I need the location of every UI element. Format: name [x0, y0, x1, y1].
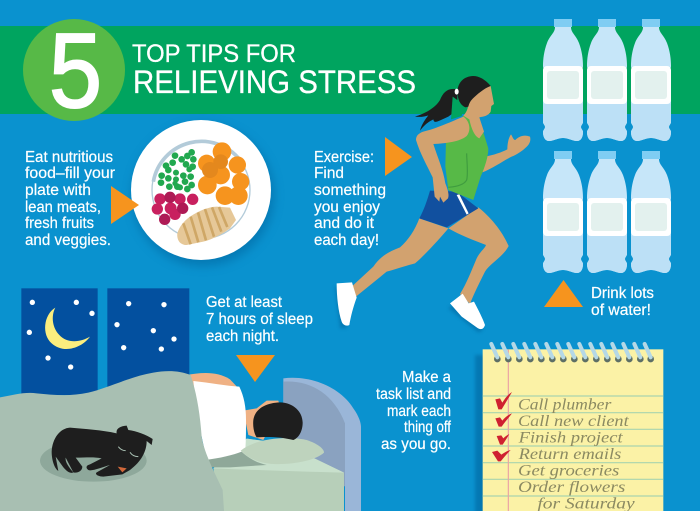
text: task tip — [376, 369, 452, 453]
title: TOP TIPS FOR — [132, 40, 296, 68]
pillow — [241, 438, 324, 464]
plate rim — [152, 141, 250, 239]
text: task tip: as you go. — [381, 436, 451, 453]
text: exercise tip: Exercise: — [314, 149, 374, 166]
text: exercise tip: you enjoy — [314, 199, 380, 216]
neck and hand — [243, 401, 280, 440]
shirt fold — [448, 153, 467, 187]
arrow: water — [544, 280, 583, 307]
head board — [283, 378, 361, 511]
text: sleep tip: each night. — [206, 328, 279, 345]
spiral binding — [491, 344, 654, 362]
shoulder skin — [187, 373, 240, 390]
shoes — [337, 282, 485, 329]
title: RELIEVING STRESS — [133, 64, 416, 100]
margin line — [507, 349, 510, 511]
moon — [45, 308, 90, 349]
mattress — [213, 439, 344, 511]
shadow — [475, 355, 662, 511]
text: nutrition tip: fresh fruits — [25, 215, 94, 232]
text: nutrition tip: lean meats, — [25, 199, 101, 216]
shorts — [419, 191, 478, 227]
text: exercise tip: Find — [314, 165, 344, 182]
window right — [107, 288, 189, 388]
ponytail — [415, 89, 457, 131]
handwritten list: Get groceries — [518, 462, 619, 479]
blanket — [0, 371, 224, 511]
neck and head — [463, 86, 494, 138]
text: nutrition tip: plate with — [25, 182, 91, 199]
green title band — [0, 26, 700, 114]
runner — [335, 76, 530, 333]
text: nutrition tip: and veggies. — [25, 232, 111, 249]
text: task tip: thing off — [404, 419, 452, 436]
arrow: nutrition — [111, 186, 139, 224]
handwritten list: Call new client — [518, 413, 630, 430]
window left — [21, 288, 98, 395]
text: sleep tip — [206, 294, 313, 345]
near arm — [416, 117, 469, 203]
front leg — [448, 207, 509, 304]
text: sleep tip: Get at least — [206, 294, 283, 311]
shorts stripe — [457, 194, 469, 215]
carrots — [198, 142, 249, 205]
green collar behind neck — [451, 97, 464, 119]
torso — [445, 116, 488, 200]
plate of food — [131, 120, 274, 266]
text: nutrition tip — [25, 149, 115, 249]
text: sleep tip: 7 hours of sleep — [206, 311, 313, 328]
peas — [158, 149, 197, 192]
head — [253, 402, 303, 440]
text: exercise tip: something — [314, 182, 386, 199]
handwritten list: Call plumber — [518, 396, 613, 413]
paper — [483, 349, 663, 511]
back leg — [352, 218, 448, 297]
title — [132, 40, 416, 100]
bottles of water — [543, 19, 671, 273]
far arm — [482, 134, 530, 173]
handwritten list: Order flowers — [518, 479, 625, 496]
pillow shadow — [205, 452, 267, 467]
sleep scene — [0, 288, 361, 511]
arrow: exercise — [385, 137, 412, 176]
stars — [27, 300, 177, 370]
hair — [457, 76, 491, 107]
text: water tip: Drink lots — [591, 285, 654, 302]
dog — [40, 426, 153, 482]
text: nutrition tip: food–fill your — [25, 165, 115, 182]
hair tie — [455, 89, 459, 95]
shoe shadow — [335, 287, 483, 333]
text: water tip: of water! — [591, 302, 651, 319]
rule lines — [483, 396, 663, 496]
arrow: sleep — [236, 355, 275, 382]
handwritten list: Finish project — [517, 430, 624, 447]
text: exercise tip — [314, 149, 386, 249]
chicken — [177, 207, 236, 245]
text: task tip: mark each — [387, 403, 451, 420]
beets — [152, 192, 198, 225]
handwritten list: Return emails — [517, 446, 621, 463]
number 5 badge — [23, 12, 125, 130]
shirt — [193, 381, 246, 460]
text: exercise tip: each day! — [314, 232, 379, 249]
number 5 badge: 5 — [49, 12, 102, 130]
notepad — [475, 344, 663, 511]
text: exercise tip: and do it — [314, 215, 375, 232]
text: nutrition tip: Eat nutritious — [25, 149, 113, 166]
handwritten list — [517, 396, 635, 511]
check marks — [492, 392, 512, 461]
text: task tip: Make a — [402, 369, 451, 386]
text: water tip — [591, 285, 654, 319]
text: task tip: task list and — [376, 386, 451, 403]
